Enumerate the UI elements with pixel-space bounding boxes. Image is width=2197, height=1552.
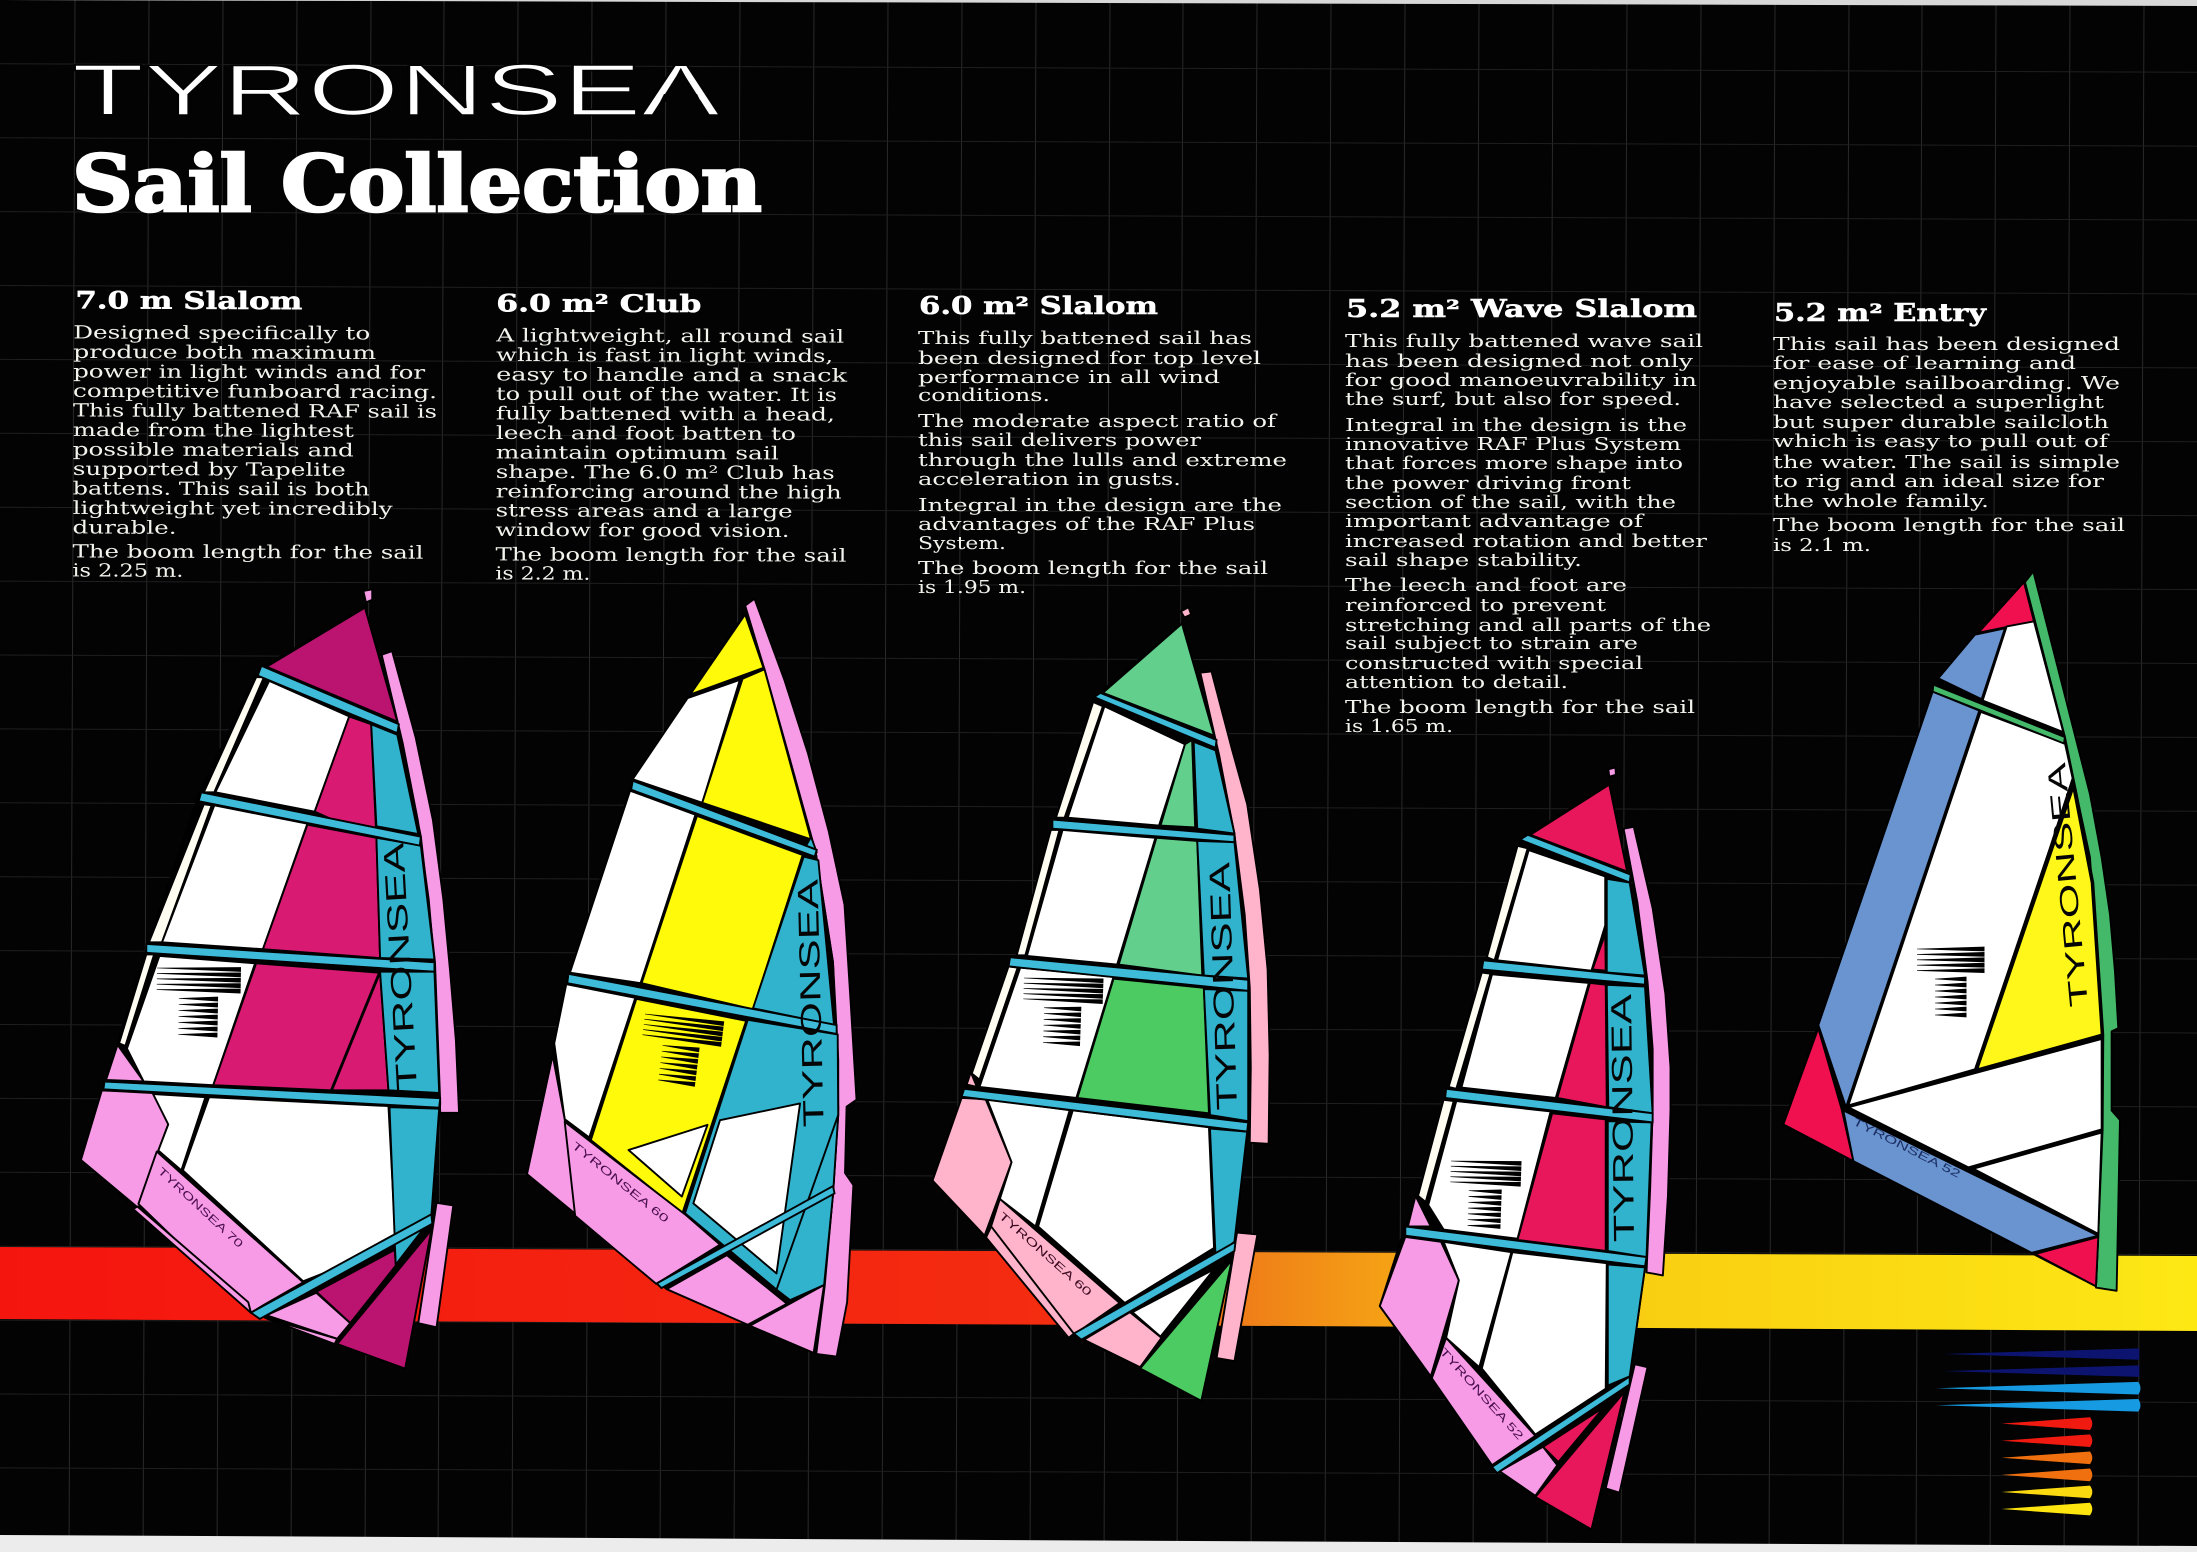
description: sail shape stability. [1345,550,1582,571]
icon: T logo [637,1012,724,1089]
description: leech and foot batten to [496,423,796,445]
description: sail subject to strain are [1345,633,1638,654]
description: competitive funboard racing. [73,381,437,403]
description: window for good vision. [496,520,790,542]
description: fully battened with a head, [496,403,835,426]
description: enjoyable sailboarding. We [1773,373,2120,394]
description: System. [918,533,1006,554]
description: This fully battened RAF sail is [73,400,437,423]
description [1345,331,1711,737]
description: Integral in the design is the [1345,415,1687,436]
heading: 5.2 m² Wave Slalom [1346,294,1697,323]
description: is 2.25 m. [72,560,183,582]
description: maintain optimum sail [496,442,779,464]
description: The boom length for the sail [1773,515,2125,536]
description: important advantage of [1345,511,1645,532]
description: shape. The 6.0 m² Club has [496,462,835,484]
description: This sail has been designed [1773,334,2120,355]
description: made from the lightest [73,420,355,442]
description: constructed with special [1345,653,1643,674]
text block: 7.0 m Slalom [72,285,437,583]
description: The boom length for the sail [918,558,1268,579]
description: through the lulls and extreme [918,450,1287,471]
heading: 6.0 m² Club [496,288,701,318]
description: This fully battened wave sail [1345,331,1703,352]
description: performance in all wind [918,367,1220,388]
text block: 5.2 m2 Wave Slalom [1345,294,1711,737]
description: is 1.65 m. [1345,716,1453,737]
description [1773,334,2125,556]
description: The moderate aspect ratio of [918,411,1278,432]
sail: 6.0 m2 Club [527,599,857,1357]
description: easy to handle and a snack [496,364,849,387]
description: for good manoeuvrability in [1345,370,1698,391]
description: durable. [73,517,177,539]
description: The leech and foot are [1345,575,1627,596]
sail logo text: TYRONSEA [1606,993,1641,1242]
description: stress areas and a large [496,500,793,522]
sail logo text: TYRONSEA [2041,760,2094,1008]
title: Sail Collection [72,139,762,230]
description: section of the sail, with the [1345,492,1676,513]
description: but super durable sailcloth [1773,412,2110,433]
foot label: TYRONSEA 60 [996,1210,1094,1299]
sail panels [1380,767,1670,1529]
sail: 5.2 m2 Entry [1783,571,2120,1291]
description: battens. This sail is both [73,478,370,500]
description: conditions. [918,385,1050,406]
description: power in light winds and for [73,361,426,384]
icon: T logo [1917,947,1984,1017]
sail logo text: TYRONSEA [378,841,424,1091]
sail logo text: TYRONSEA [1204,861,1244,1111]
description: has been designed not only [1345,351,1694,372]
description [72,322,437,583]
heading: 7.0 m Slalom [75,285,302,315]
description: been designed for top level [918,348,1261,369]
icon: T logo [156,966,241,1038]
heading: 6.0 m² Slalom [919,291,1158,320]
description: the water. The sail is simple [1773,452,2120,473]
sail logo text: TYRONSEA [793,878,831,1128]
description [494,325,849,586]
sail panels [933,607,1270,1401]
description: increased rotation and better [1345,531,1708,552]
description: reinforced to prevent [1345,595,1607,616]
description: that forces more shape into [1345,453,1683,474]
text block: 5.2 m2 Entry [1773,298,2125,556]
description: which is fast in light winds, [496,345,833,367]
sail panels [1783,571,2120,1291]
description: to rig and an ideal size for [1773,471,2105,492]
foot label: TYRONSEA 60 [569,1140,671,1225]
description: The boom length for the sail [495,544,847,567]
description: which is easy to pull out of [1773,431,2110,452]
brand logo: TYRONSEA: TYRONSEA [72,51,720,131]
heading: 5.2 m² Entry [1774,298,1987,327]
description: The boom length for the sail [72,541,424,564]
description: stretching and all parts of the [1345,615,1711,636]
icon: T logo [1449,1159,1522,1230]
description: supported by Tapelite [73,459,346,481]
description: acceleration in gusts. [918,469,1181,490]
sail panels [81,589,459,1369]
description: Designed specifically to [73,322,370,344]
foot label: TYRONSEA 52 [1437,1346,1525,1442]
description: the power driving front [1345,473,1632,494]
description: lightweight yet incredibly [73,498,394,520]
description: this sail delivers power [918,430,1202,451]
description: the whole family. [1773,491,1989,512]
description: for ease of learning and [1773,353,2076,374]
description: is 2.2 m. [495,563,590,585]
sail panels [527,599,857,1357]
description: is 2.1 m. [1773,535,1871,556]
description: innovative RAF Plus System [1345,434,1681,455]
description: have selected a superlight [1773,392,2105,413]
description: to pull out of the water. It is [496,384,837,406]
sail: 6.0 m2 Slalom [933,607,1270,1401]
description: the surf, but also for speed. [1345,389,1681,410]
description: The boom length for the sail [1345,697,1695,718]
icon: tapered colour stripes [1937,1348,2140,1515]
colour band [0,1247,2197,1331]
description: A lightweight, all round sail [495,325,845,348]
description: reinforcing around the high [496,481,842,504]
description: is 1.95 m. [918,577,1026,598]
description: advantages of the RAF Plus [918,514,1255,535]
description: attention to detail. [1345,672,1568,693]
description: Integral in the design are the [918,495,1282,516]
sail: 7.0 m Slalom [81,589,459,1369]
icon: T logo [1022,976,1104,1047]
description: possible materials and [73,439,354,461]
sail: 5.2 m2 Wave Slalom [1380,767,1670,1529]
text block: 6.0 m2 Slalom [918,291,1287,598]
description [918,328,1287,598]
foot label: TYRONSEA 52 [1851,1116,1962,1181]
text block: 6.0 m2 Club [494,288,849,586]
description: produce both maximum [73,342,376,364]
description: This fully battened sail has [918,328,1252,349]
foot label: TYRONSEA 70 [155,1165,245,1251]
